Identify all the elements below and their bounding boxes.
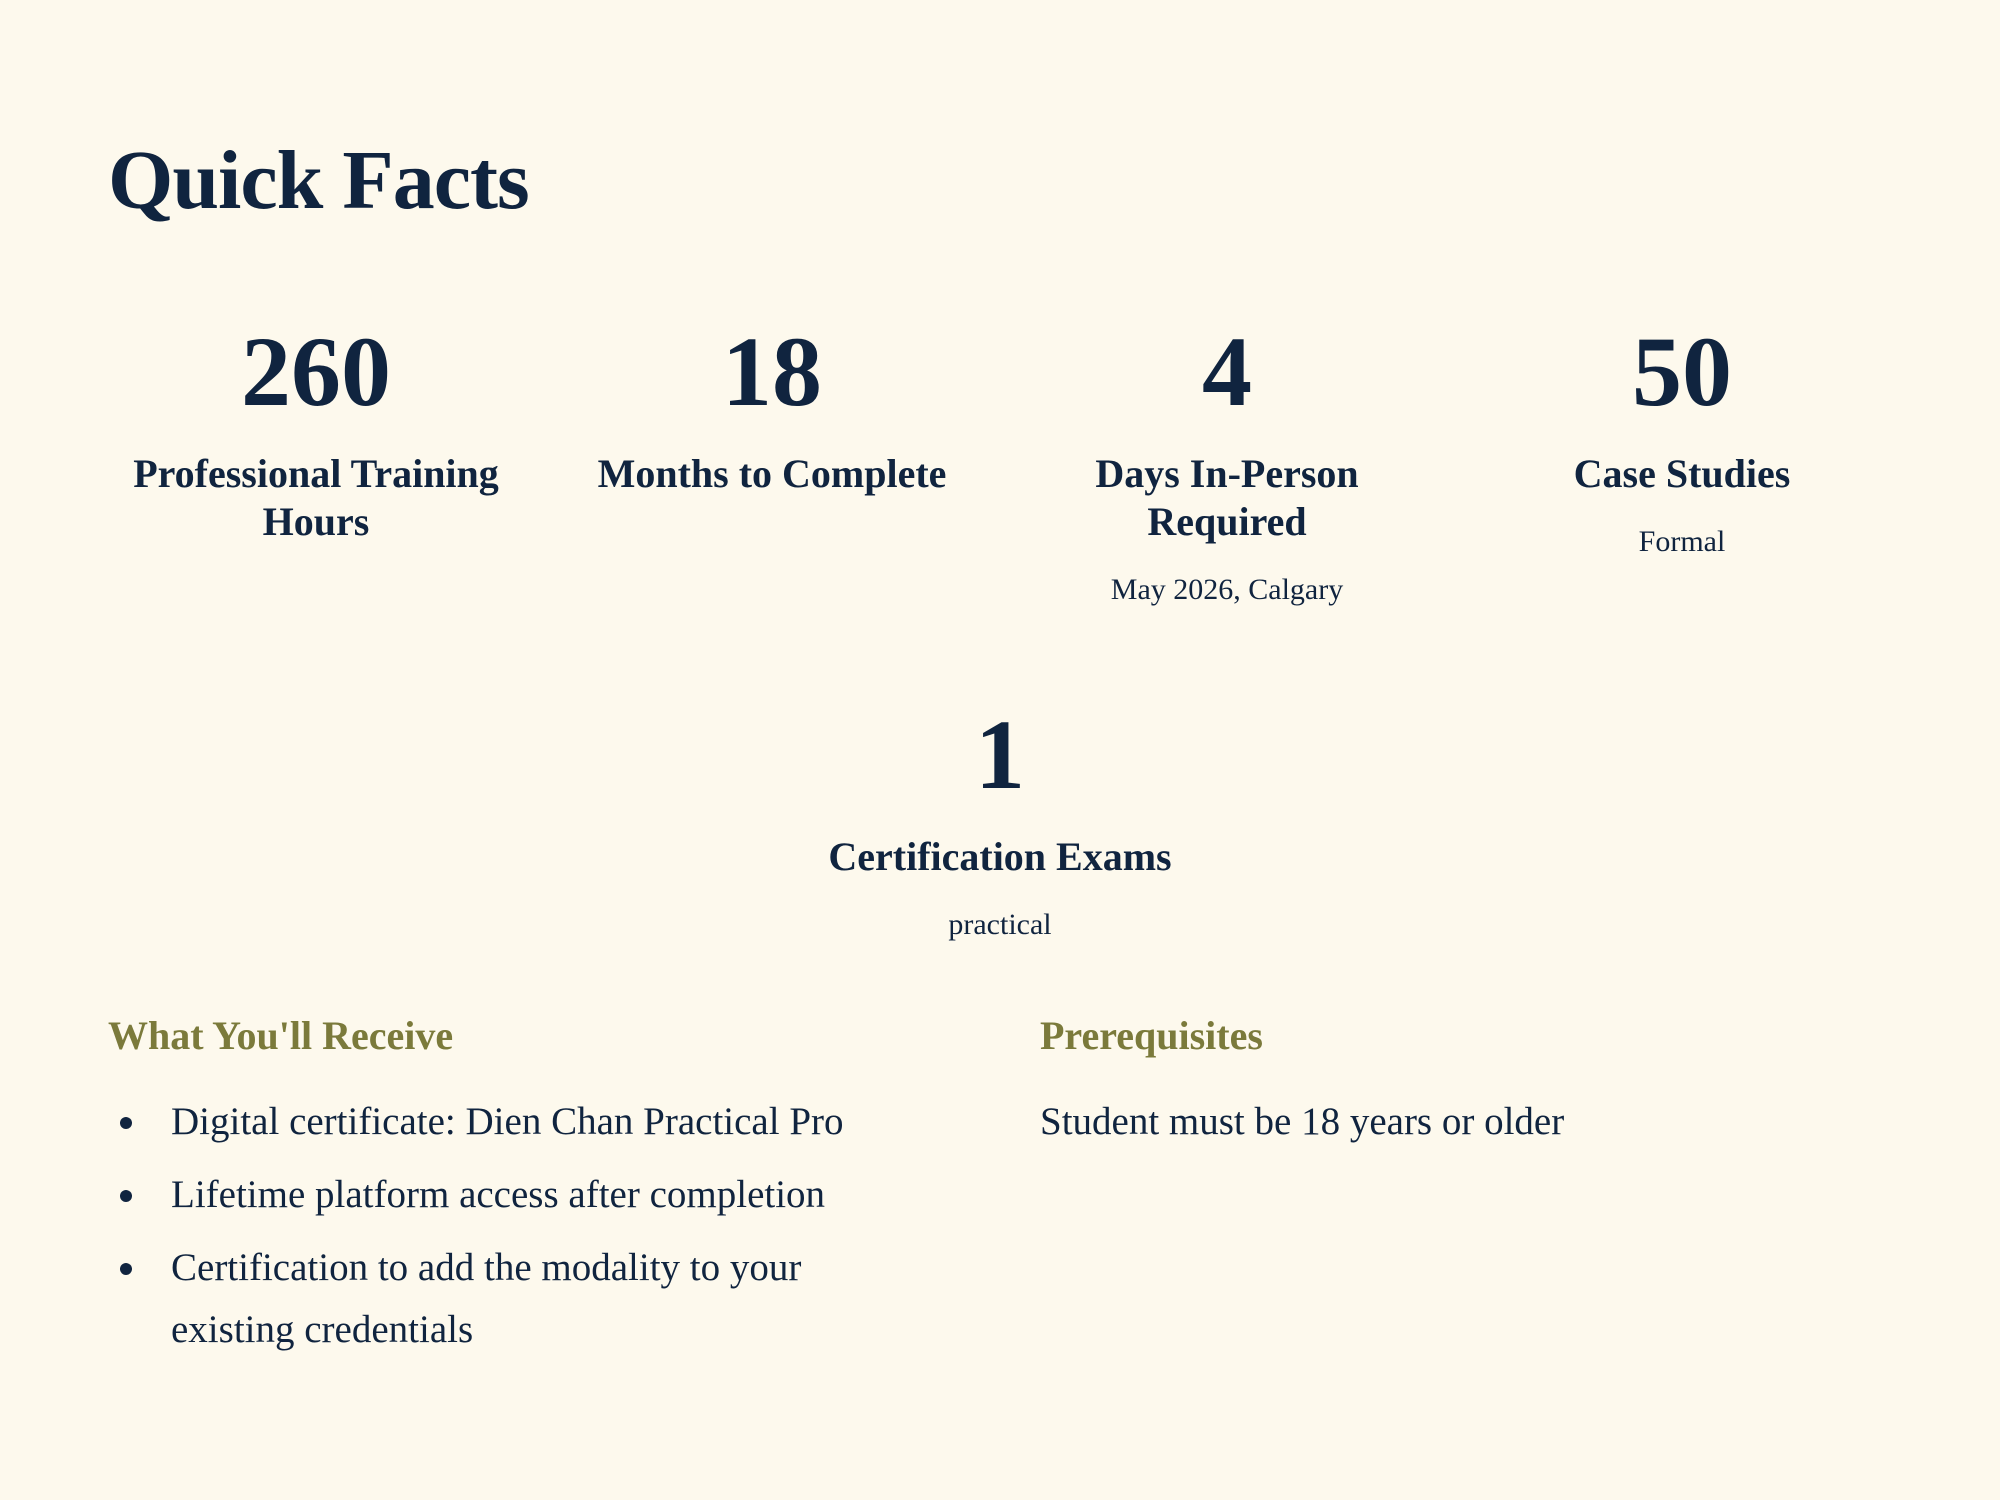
section: what you'll receive xyxy=(108,1013,844,1351)
stat: 4 days: May 2026, Calgary xyxy=(1111,573,1343,606)
stat: 260 hours: Professional Training xyxy=(133,451,499,496)
stat: 1 exam: Certification Exams xyxy=(828,834,1172,879)
stat: 260 hours xyxy=(133,316,499,544)
heading: prerequisites: Prerequisites xyxy=(1040,1013,1263,1058)
stat: 1 exam: 1 xyxy=(975,699,1025,810)
stat: 260 hours: Hours xyxy=(263,499,369,544)
title: Quick Facts xyxy=(108,134,529,227)
stat: 1 exam: practical xyxy=(948,908,1052,941)
section: prerequisites xyxy=(1040,1013,1564,1143)
stat: 50 case studies xyxy=(1574,316,1790,558)
stat: 4 days: 4 xyxy=(1202,316,1252,427)
stat: 260 hours: 260 xyxy=(241,316,391,427)
bullet list: Certification to add the modality to your existing credentials xyxy=(171,1246,801,1351)
stat: 18 months: Months to Complete xyxy=(598,451,946,496)
heading: receive: What You'll Receive xyxy=(108,1013,453,1058)
bullet list: Digital certificate: Dien Chan Practical Pro xyxy=(171,1100,844,1143)
stat: 18 months: 18 xyxy=(722,316,822,427)
stat: 50 case studies: 50 xyxy=(1632,316,1732,427)
stat: 50 case studies: Case Studies xyxy=(1574,451,1790,496)
stat: 1 exam xyxy=(828,699,1172,941)
stat: 4 days: Days In-Person xyxy=(1095,451,1359,496)
stat: 18 months xyxy=(598,316,946,496)
stat: 50 case studies: Formal xyxy=(1639,525,1725,558)
bullet list xyxy=(120,1100,844,1351)
prerequisite text: Student must be 18 years or older xyxy=(1040,1100,1564,1143)
stat: 4 days: Required xyxy=(1147,499,1307,544)
bullet list: Lifetime platform access after completion xyxy=(171,1173,825,1216)
stat: 4 days xyxy=(1095,316,1359,606)
